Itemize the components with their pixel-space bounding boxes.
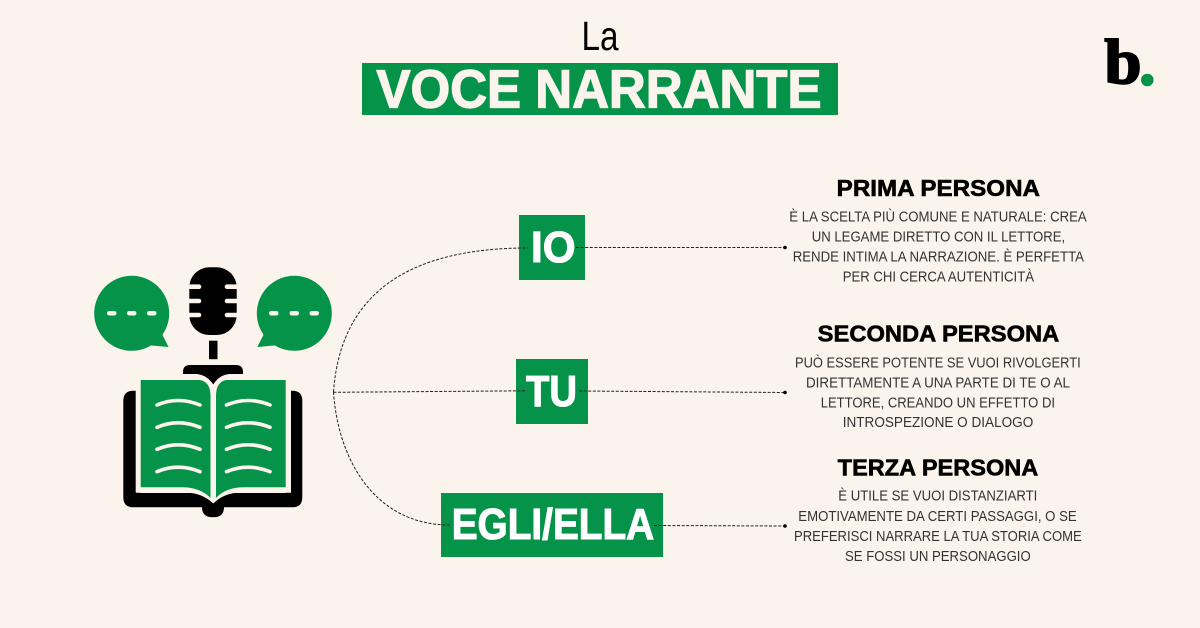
text block: prima persona <box>789 175 1087 286</box>
text block: seconda persona <box>795 321 1081 431</box>
label: TU: TU <box>526 367 577 416</box>
title <box>362 13 838 120</box>
illustration: book with microphone and speech bubbles <box>94 267 332 517</box>
text block: seconda persona: INTROSPEZIONE O DIALOGO <box>843 415 1033 431</box>
text block: seconda persona: PUÒ ESSERE POTENTE SE VUOI RIVOLGERTI <box>795 354 1081 371</box>
text block: seconda persona: SECONDA PERSONA <box>818 321 1059 347</box>
text block: terza persona: TERZA PERSONA <box>838 455 1038 481</box>
text block: prima persona: PER CHI CERCA AUTENTICITÀ <box>843 269 1034 286</box>
text block: prima persona: UN LEGAME DIRETTO CON IL LETTORE, <box>812 230 1065 246</box>
text block: terza persona: È UTILE SE VUOI DISTANZIARTI <box>838 488 1037 505</box>
text block: seconda persona: LETTORE, CREANDO UN EFFETTO DI <box>821 395 1055 411</box>
title: VOCE NARRANTE <box>376 60 822 120</box>
title: La <box>582 13 619 59</box>
text block: seconda persona: DIRETTAMENTE A UNA PARTE DI TE O AL <box>806 375 1070 391</box>
text block: prima persona: È LA SCELTA PIÙ COMUNE E NATURALE: CREA <box>789 209 1087 226</box>
text block: terza persona: PREFERISCI NARRARE LA TUA STORIA COME <box>794 529 1082 545</box>
text block: terza persona: SE FOSSI UN PERSONAGGIO <box>845 549 1031 565</box>
icon: microphone <box>183 267 243 384</box>
text block: prima persona: PRIMA PERSONA <box>837 175 1040 201</box>
icon: right speech bubble <box>257 276 332 351</box>
logo: b <box>1104 27 1142 97</box>
icon: open book <box>123 376 302 517</box>
label: IO: IO <box>531 223 576 272</box>
label: IO <box>519 215 585 280</box>
connector lines <box>334 246 787 528</box>
label: EGLI/ELLA: EGLI/ELLA <box>452 500 654 549</box>
text block: terza persona <box>794 455 1082 565</box>
icon: left speech bubble <box>94 276 169 351</box>
text block: prima persona: RENDE INTIMA LA NARRAZIONE. È PERFETTA <box>793 249 1084 266</box>
label: EGLI/ELLA <box>441 493 663 557</box>
text block: terza persona: EMOTIVAMENTE DA CERTI PASSAGGI, O SE <box>798 509 1077 525</box>
label: TU <box>516 359 588 424</box>
